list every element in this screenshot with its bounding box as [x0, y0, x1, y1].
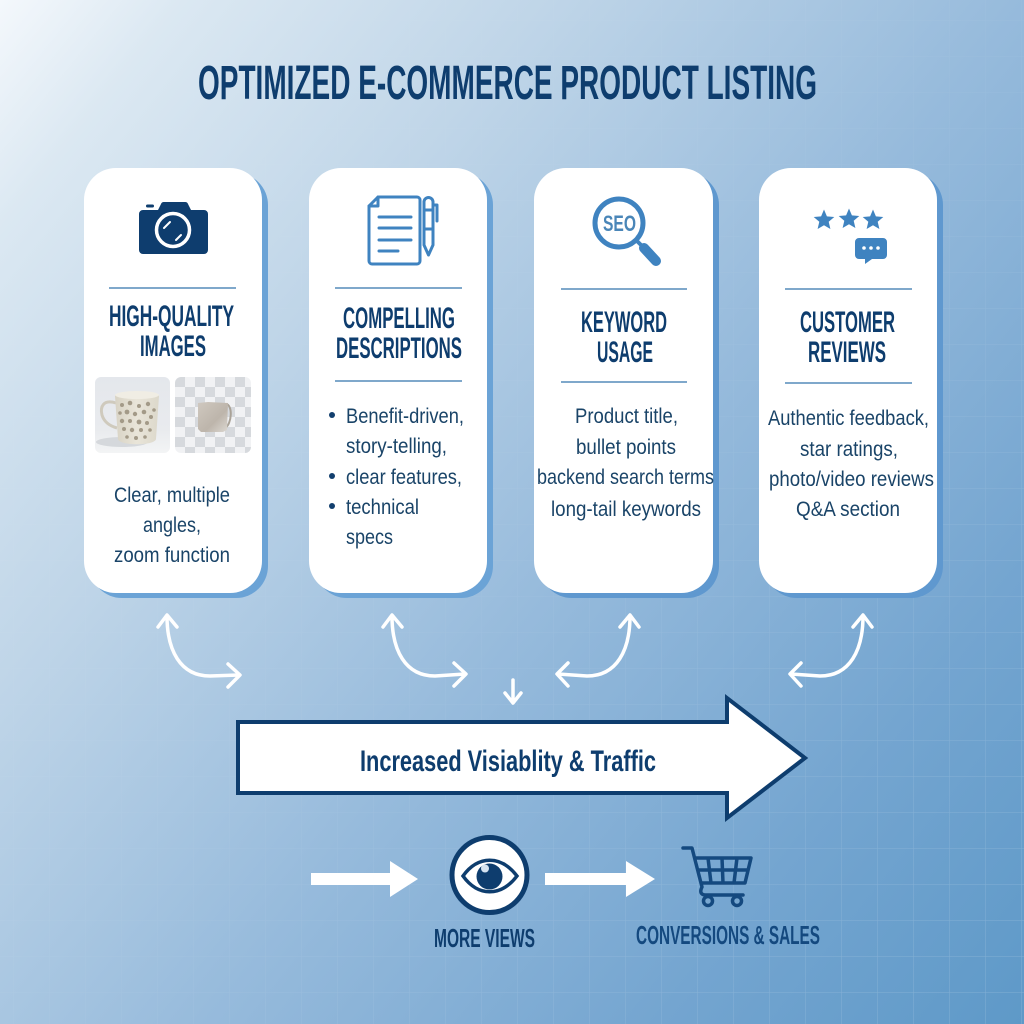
panel: compelling descriptions: [309, 168, 493, 598]
photo: patterned mug: [95, 377, 170, 453]
heading: high-quality images: HIGH-QUALITY: [109, 300, 234, 333]
arrow: to conversions and sales: [545, 861, 655, 897]
text: image details: zoom function: [114, 544, 230, 567]
text: review details: photo/video reviews: [769, 468, 934, 491]
icon: SEO magnifier: SEO: [603, 211, 636, 236]
icon: SEO magnifier: [595, 199, 656, 261]
heading: keyword usage: USAGE: [597, 336, 653, 369]
text: image details: [114, 484, 230, 567]
label: conversions and sales: CONVERSIONS & SALES: [636, 920, 820, 950]
text: review details: [768, 407, 934, 521]
text: keyword placements: bullet points: [576, 436, 676, 459]
heading: keyword usage: [581, 306, 667, 369]
arrow: curved connector 3: [557, 615, 639, 686]
heading: compelling descriptions: [336, 302, 462, 365]
banner arrow: increased visibility and traffic: Increased Visiablity & Traffic: [360, 745, 656, 778]
text: review details: Q&A section: [796, 498, 900, 521]
list: description points: Benefit-driven,: [346, 405, 464, 428]
icon: document and pen: [369, 197, 437, 264]
list: description points: [329, 405, 464, 549]
list: description points: technical: [346, 496, 419, 519]
icon: eye: [452, 838, 527, 912]
text: keyword placements: long-tail keywords: [551, 498, 701, 521]
heading: compelling descriptions: COMPELLING: [343, 302, 455, 335]
list: description points: specs: [346, 526, 393, 549]
banner arrow: increased visibility and traffic: [238, 698, 805, 818]
text: image details: angles,: [143, 514, 201, 537]
label: more views: MORE VIEWS: [434, 923, 535, 953]
list: description points: story-telling,: [346, 435, 447, 458]
panel: keyword usage: [534, 168, 719, 598]
icon: camera: [139, 202, 208, 254]
arrow: to more views: [311, 861, 418, 897]
text: keyword placements: backend search terms: [537, 466, 714, 489]
heading: high-quality images: IMAGES: [140, 330, 206, 363]
arrow: curved connector 1: [158, 615, 240, 687]
icon: stars and chat bubble: [814, 208, 887, 264]
arrow: curved connector 4: [790, 615, 872, 686]
heading: customer reviews: [800, 306, 895, 369]
photo: mug on transparent background: [175, 377, 251, 453]
list: description points: clear features,: [346, 466, 462, 489]
panel: customer reviews: [759, 168, 943, 598]
icon: shopping cart: [683, 848, 751, 906]
heading: compelling descriptions: DESCRIPTIONS: [336, 332, 462, 365]
heading: customer reviews: CUSTOMER: [800, 306, 895, 339]
text: keyword placements: Product title,: [575, 405, 678, 428]
heading: keyword usage: KEYWORD: [581, 306, 667, 339]
arrow: curved connector 2: [383, 615, 466, 686]
text: review details: Authentic feedback,: [768, 407, 929, 430]
text: review details: star ratings,: [800, 438, 898, 461]
text: image details: Clear, multiple: [114, 484, 230, 507]
text: keyword placements: [537, 405, 714, 521]
panel: high-quality images: [84, 168, 268, 598]
arrow: small down arrow: [505, 680, 521, 703]
heading: high-quality images: [109, 300, 234, 363]
heading: customer reviews: REVIEWS: [808, 336, 886, 369]
